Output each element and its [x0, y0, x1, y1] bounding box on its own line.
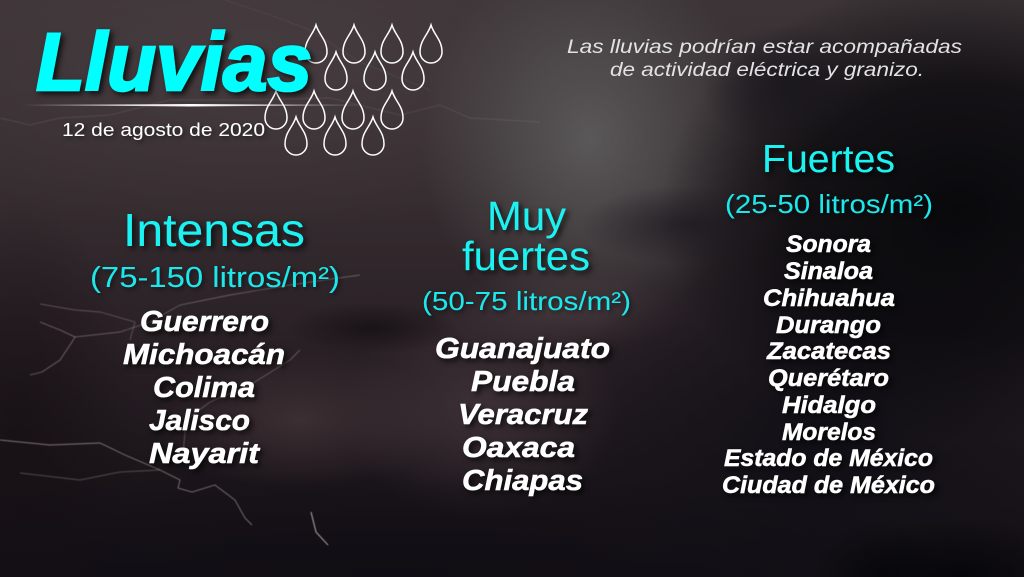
date: 12 de agosto de 2020: [62, 119, 265, 140]
states list: intensas: Guerrero: [140, 306, 269, 338]
subtitle note: Las lluvias podrían estar acompañadas: [567, 37, 963, 58]
range: 50-75 litros: (50-75 litros/m²): [422, 286, 631, 316]
lightning bolts: [0, 0, 540, 545]
panel: muy fuertes: [422, 193, 631, 497]
states list: fuertes: [722, 231, 935, 499]
panel: intensas: [90, 204, 340, 470]
heading: muy fuertes: Muy: [487, 193, 566, 239]
states list: fuertes: Querétaro: [768, 365, 889, 392]
title: Lluvias: [36, 17, 312, 108]
states list: fuertes: Sinaloa: [784, 258, 873, 285]
states list: fuertes: Durango: [776, 312, 881, 339]
title rule: [22, 104, 366, 106]
icon: rain drops: [265, 25, 442, 155]
heading: fuertes: Fuertes: [762, 138, 895, 181]
states list: fuertes: Estado de México: [724, 445, 933, 472]
heading: muy fuertes: [462, 193, 590, 279]
states list: fuertes: Zacatecas: [766, 338, 891, 365]
subtitle note: [567, 37, 963, 81]
states list: intensas: Colima: [153, 372, 255, 404]
subtitle note: de actividad eléctrica y granizo.: [610, 60, 924, 81]
heading: muy fuertes: fuertes: [462, 233, 590, 279]
range: 25-50 litros: (25-50 litros/m²): [725, 189, 933, 219]
states list: muy fuertes: [435, 333, 610, 497]
states list: fuertes: Sonora: [786, 231, 871, 258]
states list: fuertes: Ciudad de México: [722, 472, 935, 499]
states list: muy fuertes: Guanajuato: [435, 333, 610, 365]
states list: muy fuertes: Veracruz: [458, 399, 589, 431]
states list: muy fuertes: Chiapas: [462, 465, 583, 497]
states list: muy fuertes: Puebla: [471, 366, 575, 398]
states list: intensas: [123, 306, 285, 470]
panel: fuertes: [722, 138, 935, 499]
states list: fuertes: Morelos: [782, 419, 876, 446]
states list: intensas: Nayarit: [149, 438, 261, 470]
states list: muy fuertes: Oaxaca: [462, 432, 575, 464]
states list: intensas: Michoacán: [123, 339, 285, 371]
heading: intensas: Intensas: [123, 204, 305, 256]
states list: fuertes: Chihuahua: [763, 285, 895, 312]
states list: intensas: Jalisco: [149, 405, 250, 437]
range: 75-150 litros: (75-150 litros/m²): [90, 262, 340, 294]
states list: fuertes: Hidalgo: [782, 392, 876, 419]
